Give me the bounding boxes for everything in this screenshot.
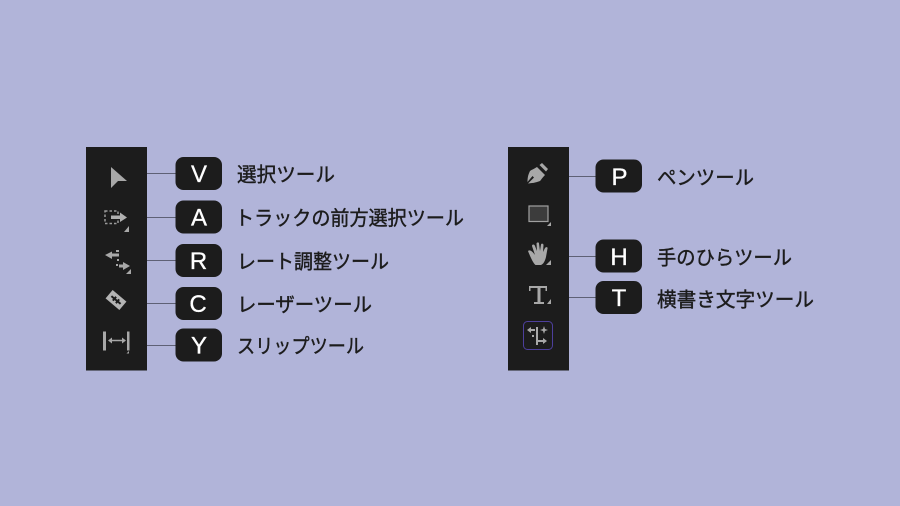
icon: razor [106,290,126,310]
key V row: V [191,161,207,188]
icon: type [529,286,551,304]
icon: AI edit tool [524,322,552,350]
key V row [176,157,335,190]
icon: hand [528,242,551,265]
icon: rate stretch [105,250,131,274]
key A row [176,200,464,234]
key H row [596,240,792,272]
key Y row [176,328,364,362]
key C row: C [189,291,207,318]
key R row: R [190,248,207,275]
key P row: P [611,164,628,191]
icon: selection arrow [111,167,127,188]
panel: right toolbar [508,147,569,370]
key Y row: スリップツール [237,336,364,358]
icon: slip [103,332,130,354]
panel: left toolbar [86,147,147,370]
key C row [176,287,372,320]
key T row: 横書き文字ツール [657,288,814,312]
key C row: レーザーツール [237,294,372,316]
key A row: A [191,204,207,232]
key H row: 手のひらツール [657,246,792,270]
key R row: レート調整ツール [237,250,389,274]
key P row: ペンツール [657,168,754,190]
key P row [596,160,754,192]
connector lines right [569,176,596,298]
icon: pen [528,163,548,184]
key T row [596,281,814,314]
key A row: トラックの前方選択ツール [235,207,464,230]
key T row: T [612,285,627,312]
key R row [176,244,389,277]
icon: rectangle [529,206,551,226]
key V row: 選択ツール [237,164,335,186]
key Y row: Y [191,332,207,360]
key H row: H [610,244,628,271]
connector lines left [147,174,176,346]
icon: track select forward [105,211,129,232]
